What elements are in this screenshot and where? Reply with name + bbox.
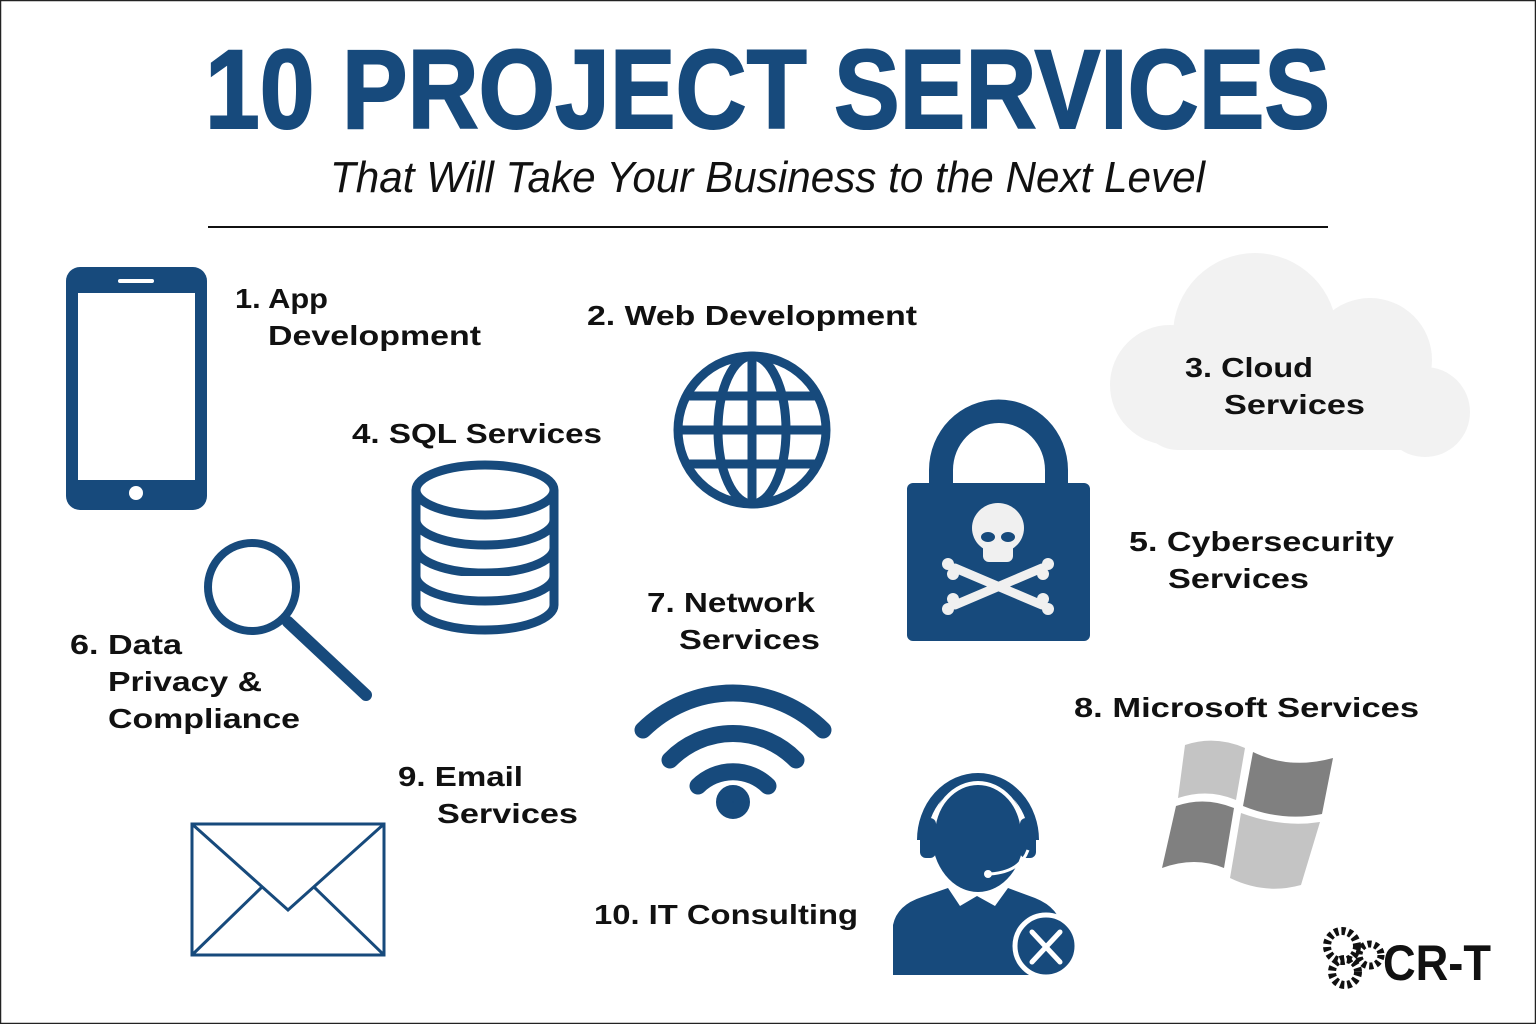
label: app development — [235, 283, 481, 351]
label: cloud services: 3. Cloud — [1185, 352, 1313, 383]
label: network services: 7. Network — [647, 587, 815, 618]
logo: CR-T — [1327, 931, 1491, 991]
label: email services — [398, 761, 578, 829]
icon: cloud — [1110, 253, 1470, 457]
icon: windows logo — [1162, 741, 1333, 889]
label: cybersecurity: 5. Cybersecurity — [1129, 526, 1395, 557]
icon: envelope — [192, 824, 384, 955]
label: data privacy — [70, 629, 300, 734]
icon: phone — [66, 267, 207, 510]
icon: database — [416, 465, 554, 630]
label: data privacy: 6. Data — [70, 629, 183, 660]
label: data privacy: Compliance — [108, 703, 300, 734]
label: cloud services: Services — [1224, 389, 1365, 420]
logo: CR-T: CR-T — [1383, 935, 1491, 991]
label: data privacy: Privacy & — [108, 666, 262, 697]
icon: wifi — [643, 693, 823, 811]
label: email services: 9. Email — [398, 761, 523, 792]
subtitle: That Will Take Your Business to the Next Level — [330, 153, 1206, 202]
label: app development: 1. App — [235, 283, 328, 314]
label: network services — [647, 587, 820, 655]
label: microsoft services: 8. Microsoft Services — [1074, 692, 1419, 723]
icon: magnifier — [208, 543, 366, 695]
title: 10 PROJECT SERVICES — [205, 27, 1330, 152]
label: app development: Development — [268, 320, 481, 351]
icon: lock with skull — [907, 399, 1090, 641]
label: cybersecurity — [1129, 526, 1395, 594]
icon: support person — [893, 778, 1077, 977]
label: web development: 2. Web Development — [587, 300, 917, 331]
label: it consulting: 10. IT Consulting — [594, 899, 858, 930]
icon: globe — [678, 356, 826, 504]
label: sql services: 4. SQL Services — [352, 418, 602, 449]
label: email services: Services — [437, 798, 578, 829]
label: cloud services — [1185, 352, 1365, 420]
label: network services: Services — [679, 624, 820, 655]
label: cybersecurity: Services — [1168, 563, 1309, 594]
